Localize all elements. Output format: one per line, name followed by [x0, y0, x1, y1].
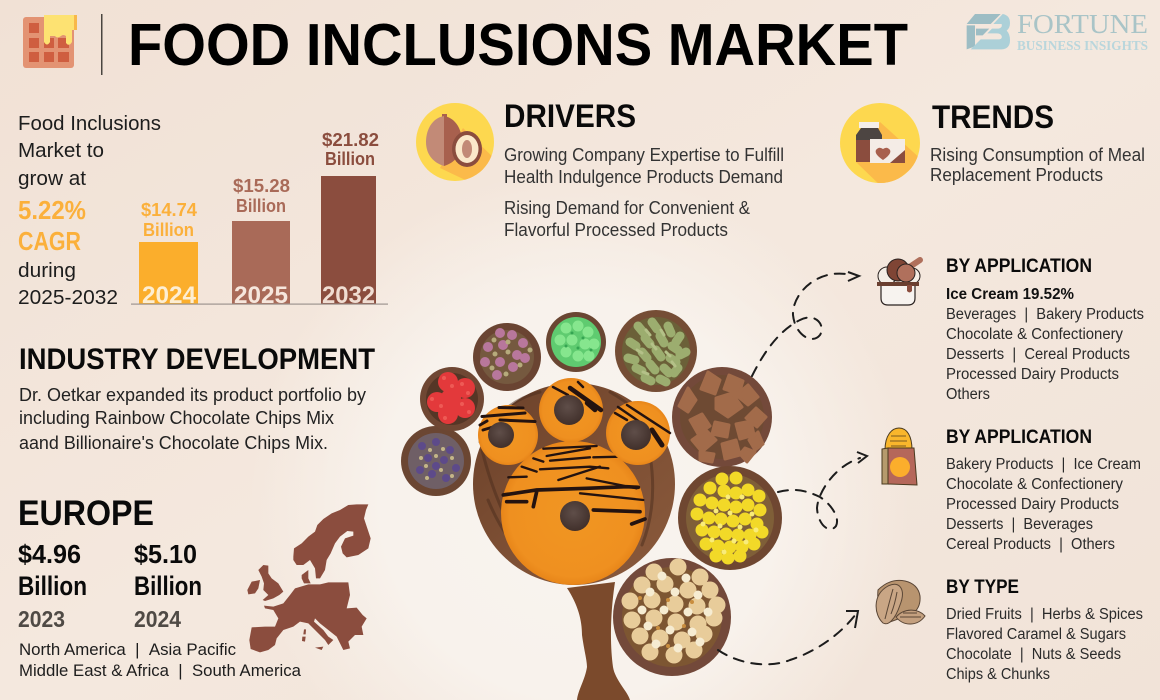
panel: by application 2: Processed Dairy Products	[946, 496, 1119, 513]
panel: by application 2: Cereal Products | Others	[946, 536, 1115, 553]
panel: CAGR statement: during	[18, 259, 76, 282]
panel: drivers: Health Indulgence Products Demand	[504, 167, 783, 187]
panel: CAGR statement: Market to	[18, 139, 104, 162]
panel: Europe: North America | Asia Pacific	[19, 640, 236, 659]
panel: CAGR statement: 5.22%	[18, 195, 86, 225]
panel: by application 1: Ice Cream 19.52%	[946, 286, 1074, 303]
panel: by type: Dried Fruits | Herbs & Spices	[946, 606, 1143, 623]
bowl: yellow puffs	[678, 466, 782, 570]
panel: drivers: Growing Company Expertise to Fulfill	[504, 145, 784, 165]
panel: by type	[876, 577, 1143, 683]
arrow: cereal bowl to application	[752, 272, 859, 376]
panel: by application 1: Beverages | Bakery Products	[946, 306, 1144, 323]
panel: trends	[840, 103, 1144, 185]
panel: by type: BY TYPE	[946, 577, 1019, 598]
panel: Europe: $4.96	[18, 539, 81, 569]
panel: Europe: 2023	[18, 606, 65, 632]
illustration: wooden board with cakes	[473, 378, 675, 700]
panel: by application 2: BY APPLICATION	[946, 427, 1092, 448]
logo: Fortune Business Insights	[967, 9, 1148, 54]
bar chart: market size: Billion	[143, 219, 194, 240]
logo: Fortune Business Insights: BUSINESS INSIGHTS	[1017, 39, 1148, 54]
panel: CAGR statement	[18, 112, 161, 309]
bar chart: market size: $15.28	[233, 175, 290, 196]
panel: by type: Flavored Caramel & Sugars	[946, 626, 1126, 643]
title: FOOD INCLUSIONS MARKET	[128, 12, 908, 78]
panel: CAGR statement: CAGR	[18, 226, 81, 256]
panel: CAGR statement: 2025-2032	[18, 286, 118, 309]
panel: by type: Chips & Chunks	[946, 666, 1050, 683]
icon: waffle with butter	[23, 15, 77, 68]
icon: nuts	[876, 580, 925, 624]
bar chart: market size: Billion	[236, 195, 286, 216]
arrow: yellow bowl to application	[778, 452, 867, 529]
panel: by application 1: Processed Dairy Products	[946, 366, 1119, 383]
panel: CAGR statement: grow at	[18, 167, 86, 190]
panel: by application 1: Others	[946, 386, 990, 403]
panel: trends: TRENDS	[932, 99, 1054, 135]
panel: by application 1: Desserts | Cereal Products	[946, 346, 1130, 363]
panel: Europe: 2024	[134, 606, 181, 632]
panel: industry development: aand Billionaire's Chocolate Chips Mix.	[19, 433, 328, 453]
panel: trends: Rising Consumption of Meal	[930, 145, 1145, 165]
panel: by application 1	[877, 256, 1144, 403]
panel: by application 1: Chocolate & Confectionery	[946, 326, 1123, 343]
bowl: raspberries	[420, 367, 484, 431]
cake: left cookie	[478, 405, 538, 465]
bar chart: market size: Billion	[325, 148, 375, 169]
bar chart: market size: $14.74	[141, 199, 198, 220]
panel: Europe: Billion	[134, 571, 202, 601]
panel: trends: Replacement Products	[930, 165, 1103, 185]
bowl: cereal squares	[672, 367, 772, 467]
panel: by application 1: BY APPLICATION	[946, 256, 1092, 277]
panel: by application 2: Bakery Products | Ice Cream	[946, 456, 1141, 473]
panel: drivers: Rising Demand for Convenient &	[504, 198, 750, 218]
panel: by application 2: Desserts | Beverages	[946, 516, 1093, 533]
icon: hazelnut fruit	[416, 103, 494, 181]
bowl: green candy	[546, 312, 606, 372]
icon: ice cream cup	[877, 259, 920, 305]
bar chart: market size: 2025	[234, 282, 288, 309]
panel: CAGR statement: Food Inclusions	[18, 112, 161, 135]
arrow: popcorn bowl to type	[718, 611, 858, 664]
panel: Europe: $5.10	[134, 539, 197, 569]
panel: industry development: Dr. Oetkar expanded its product portfolio by	[19, 385, 366, 405]
map: Europe	[247, 504, 371, 652]
panel: industry development: including Rainbow Chocolate Chips Mix	[19, 408, 334, 428]
bowl: pumpkin seeds	[615, 310, 697, 392]
panel: drivers: DRIVERS	[504, 98, 636, 134]
panel: drivers: Flavorful Processed Products	[504, 220, 728, 240]
logo: Fortune Business Insights: FORTUNE	[1017, 9, 1148, 39]
panel: Europe: Billion	[18, 571, 87, 601]
bar chart: market size: 2032	[322, 282, 375, 309]
panel: Europe: Middle East & Africa | South America	[19, 661, 302, 680]
bowl: dried purple flowers	[401, 426, 471, 496]
bar chart: market size: $21.82	[322, 129, 379, 150]
bowl: dried rose buds	[473, 323, 541, 391]
bowl: caramel popcorn	[613, 558, 731, 676]
panel: Europe	[18, 494, 302, 680]
cake: large	[501, 441, 645, 585]
panel: industry development	[19, 343, 375, 453]
panel: by application 2	[882, 427, 1141, 553]
cake: top cookie	[539, 378, 603, 442]
cake: right cookie	[606, 401, 670, 465]
icon: jar and meal box	[840, 103, 920, 183]
bar chart: market size: 2024	[142, 282, 197, 309]
panel: Europe: EUROPE	[18, 494, 154, 533]
panel: industry development: INDUSTRY DEVELOPMENT	[19, 343, 375, 376]
panel: drivers	[416, 98, 784, 240]
icon: bakery bag	[882, 428, 917, 485]
panel: by type: Chocolate | Nuts & Seeds	[946, 646, 1121, 663]
panel: by application 2: Chocolate & Confectionery	[946, 476, 1123, 493]
bar chart: market size	[131, 129, 388, 309]
